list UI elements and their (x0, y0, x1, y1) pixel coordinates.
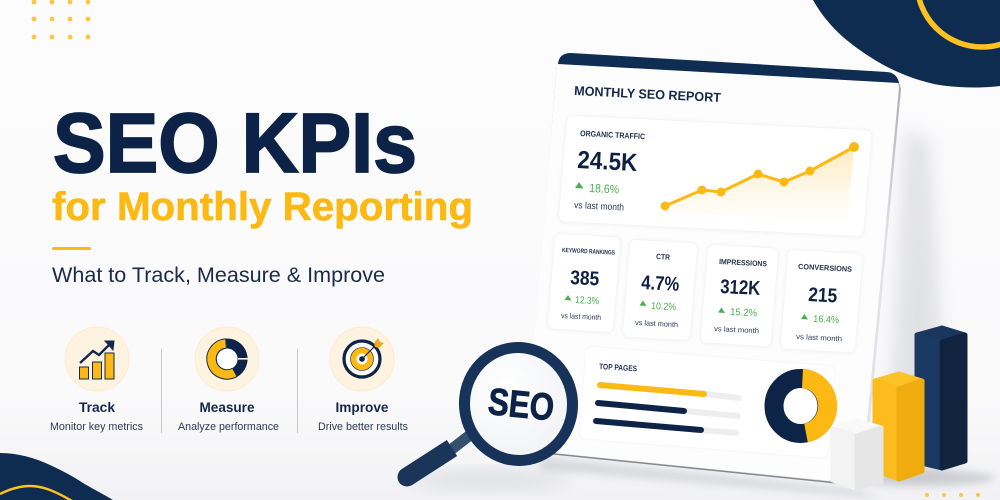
accent rule (52, 247, 91, 250)
feature: Track (50, 327, 143, 433)
feature: Measure (178, 327, 279, 433)
card: keyword rankings: vs last month (561, 311, 601, 322)
card: organic traffic: ORGANIC TRAFFIC (580, 129, 645, 141)
card: CTR: vs last month (635, 318, 678, 329)
card: CTR (622, 239, 698, 341)
feature: Measure: Analyze performance (178, 421, 279, 433)
feature: Improve: Improve (336, 399, 389, 415)
icon: rising bars and arrow (80, 341, 114, 379)
floor shadow under report (540, 456, 880, 498)
decorative blob bottom left (0, 453, 113, 500)
card: top pages (579, 346, 836, 459)
feature: Measure: Measure (200, 399, 255, 415)
line chart (660, 142, 859, 224)
lens label: SEO (486, 381, 556, 430)
subtitle: for Monthly Reporting: for Monthly Reporting (52, 185, 473, 229)
icon: target with arrow (344, 338, 384, 377)
feature: Improve (318, 327, 408, 433)
cube shadows (855, 470, 995, 486)
soft wall shadow beside report (885, 130, 950, 480)
card: organic traffic: 18.6% (589, 181, 620, 197)
top pages bars (596, 385, 739, 433)
decorative dots top left (32, 0, 90, 39)
card: conversions (780, 249, 863, 353)
card: conversions: vs last month (796, 332, 842, 343)
report title: MONTHLY SEO REPORT (574, 83, 721, 105)
decorative dots bottom right (925, 493, 980, 497)
card: keyword rankings: 385 (570, 267, 600, 290)
card: organic traffic: vs last month (574, 200, 624, 213)
card: CTR: 4.7% (641, 272, 680, 296)
card: keyword rankings: KEYWORD RANKINGS (562, 247, 615, 257)
card: CTR: 10.2% (651, 301, 676, 313)
card: organic traffic (558, 115, 872, 237)
divider (161, 349, 162, 433)
icon: magnifying glass with SEO (398, 342, 578, 486)
card: conversions: CONVERSIONS (798, 262, 852, 274)
card: impressions: IMPRESSIONS (719, 257, 767, 268)
card: CTR: CTR (656, 252, 671, 262)
feature: Track: Track (79, 399, 115, 415)
3D bar: yellow (875, 374, 922, 479)
card: organic traffic: 24.5K (577, 146, 638, 177)
card: keyword rankings (547, 233, 621, 333)
decorative blob top right (813, 0, 1000, 88)
panel: monthly SEO report (525, 53, 901, 486)
3D bar: white (833, 421, 881, 488)
icon: donut gauge (211, 343, 249, 374)
feature: Improve: Drive better results (318, 421, 408, 433)
card: top pages: TOP PAGES (599, 362, 638, 373)
card: impressions (700, 244, 779, 347)
3D bar: navy (917, 328, 965, 468)
report header band (558, 53, 899, 83)
card: keyword rankings: 12.3% (575, 295, 599, 307)
feature: Track: Monitor key metrics (50, 421, 143, 433)
card: impressions: vs last month (714, 324, 759, 335)
card: impressions: 312K (720, 276, 761, 300)
card: impressions: 15.2% (730, 307, 757, 319)
card: conversions: 16.4% (813, 314, 839, 326)
divider (297, 349, 298, 433)
title: SEO KPIs: SEO KPIs (53, 96, 417, 190)
card: conversions: 215 (808, 284, 838, 307)
tagline: What to Track, Measure & Improve (52, 264, 385, 287)
donut chart (774, 378, 828, 434)
floor shadow under magnifier (410, 472, 570, 488)
